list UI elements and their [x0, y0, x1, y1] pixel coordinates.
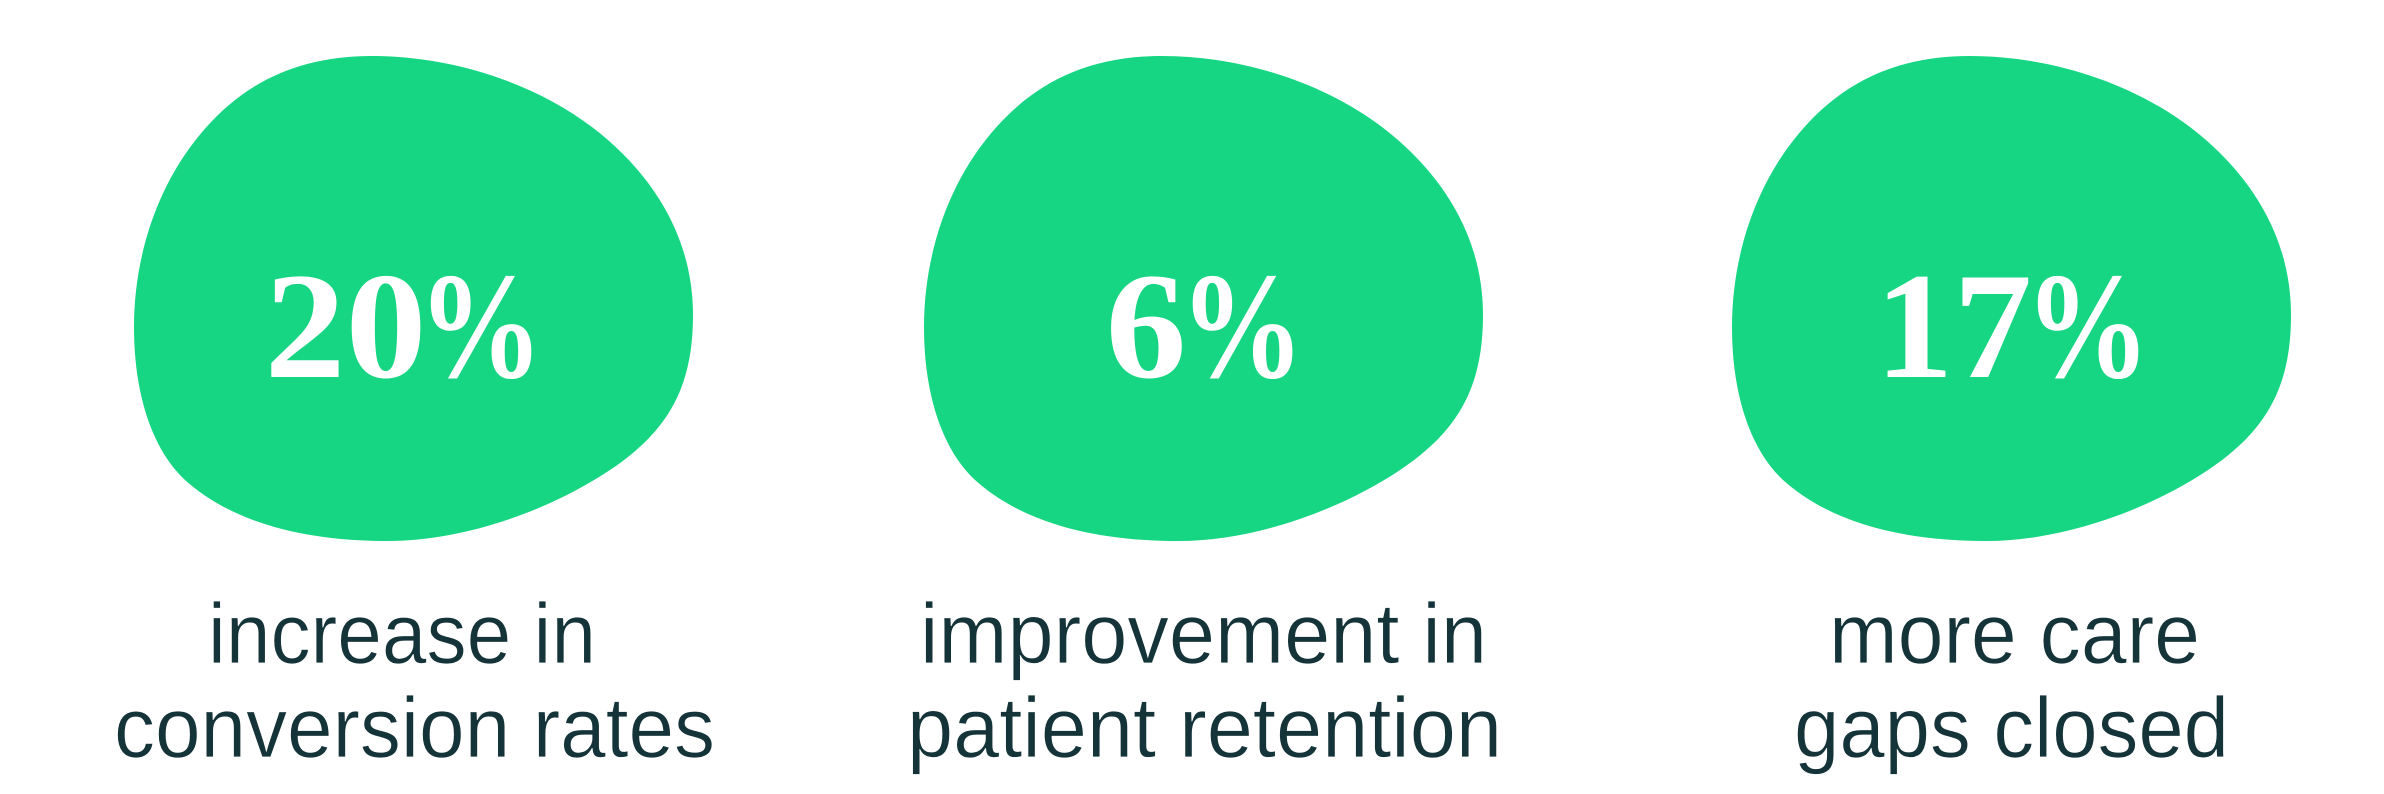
caption: more care gaps closed: gaps closed: [1794, 681, 2229, 776]
caption: more care gaps closed: more care: [1829, 587, 2200, 682]
value: 20%: 20: [264, 242, 426, 410]
panel: care gaps stat: [1732, 56, 2291, 776]
caption: more care gaps closed: [1794, 587, 2229, 776]
value: 17%: %: [2025, 242, 2150, 410]
value: 6%: [1106, 242, 1304, 410]
blob: green shape 3: [1732, 56, 2291, 541]
value: 20%: %: [418, 242, 543, 410]
value: 17%: [1875, 242, 2150, 410]
value: 6%: %: [1180, 242, 1304, 410]
caption: improvement in patient retention: improvement in: [920, 587, 1487, 682]
caption: increase in conversion rates: conversion rates: [114, 681, 715, 776]
caption: improvement in patient retention: patient retention: [907, 681, 1502, 776]
panel: patient retention stat: [907, 56, 1502, 776]
blob: green shape 1: [134, 56, 693, 541]
value: 6%: 6: [1106, 242, 1186, 410]
blob: green shape 2: [924, 56, 1483, 541]
value: 20%: [264, 242, 543, 410]
caption: increase in conversion rates: increase in: [208, 587, 596, 682]
caption: increase in conversion rates: [114, 587, 715, 776]
value: 17%: 17: [1875, 242, 2032, 410]
caption: improvement in patient retention: [907, 587, 1502, 776]
panel: conversion rates stat: [114, 56, 715, 776]
